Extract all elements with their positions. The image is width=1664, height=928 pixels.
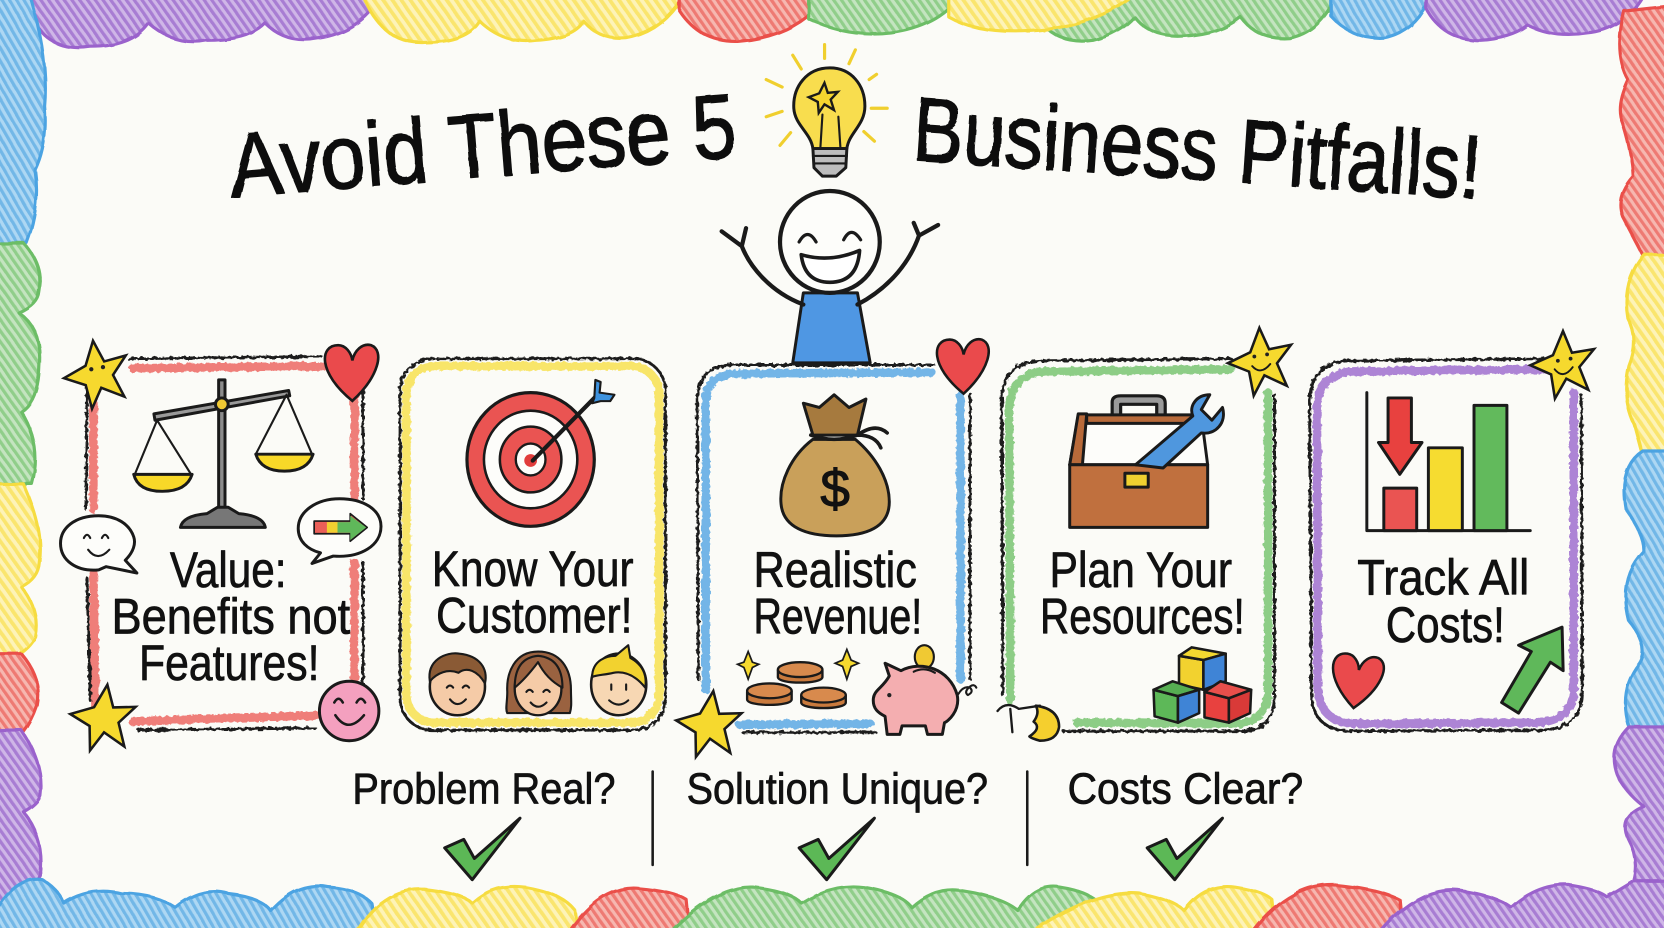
icon: heart on frame bbox=[937, 339, 989, 394]
bulb star bbox=[809, 83, 838, 113]
panel 3 text: Revenue! bbox=[753, 589, 922, 645]
panel: know your customer bbox=[400, 359, 665, 730]
icon: star top right of panel 4 bbox=[1225, 325, 1296, 398]
bulb filament bbox=[820, 115, 840, 149]
panel 3 text bbox=[753, 542, 922, 645]
dollar sign: $ bbox=[820, 460, 850, 519]
panel 2 frame bbox=[400, 359, 665, 730]
panel 2 text: Know Your bbox=[432, 541, 634, 597]
panel 1 text: Features! bbox=[139, 635, 319, 691]
panel 2 text: Customer! bbox=[436, 587, 632, 643]
bar red bbox=[1384, 488, 1417, 531]
figure arms bbox=[722, 223, 938, 305]
panel 4 text: Plan Your bbox=[1050, 542, 1232, 598]
icon: toolbox bbox=[1070, 395, 1223, 527]
panel 2 text bbox=[432, 541, 634, 643]
icon: building blocks bbox=[1154, 647, 1251, 723]
panel 5 text: Track All bbox=[1357, 549, 1529, 605]
icon: speech bubble arrow bbox=[298, 499, 381, 563]
checklist: solution unique: Solution Unique? bbox=[687, 765, 988, 813]
checklist: solution unique bbox=[687, 765, 988, 880]
panel 4 text: Resources! bbox=[1040, 589, 1245, 645]
icon: coins bbox=[747, 662, 846, 708]
panel 5 text bbox=[1357, 549, 1529, 653]
panel 1 frame bbox=[86, 357, 363, 730]
icon: star bottom left bbox=[68, 682, 137, 753]
icon: star top left bbox=[58, 336, 134, 413]
icon: pink smiley bbox=[319, 681, 379, 741]
icon: balance scale bbox=[134, 380, 313, 527]
bulb rays bbox=[766, 45, 887, 145]
icon: star on frame bbox=[674, 689, 743, 760]
arrow down red bbox=[1379, 398, 1422, 474]
checklist: problem real: Problem Real? bbox=[352, 765, 616, 813]
icon: crescent coin and scribble bbox=[998, 705, 1059, 741]
figure eyes bbox=[799, 232, 861, 242]
checklist: problem real bbox=[352, 765, 616, 880]
icon: heart top right bbox=[325, 345, 378, 401]
title: left part: Avoid These 5 bbox=[225, 75, 741, 217]
checklist: costs clear bbox=[1068, 765, 1303, 880]
bar yellow bbox=[1428, 448, 1462, 531]
face girl bbox=[506, 652, 571, 715]
border: top edge bbox=[32, 0, 1644, 48]
icon: light bulb bbox=[766, 45, 887, 176]
border: left edge bbox=[0, 0, 45, 928]
wrench bbox=[1135, 395, 1223, 468]
panel: plan your resources bbox=[998, 325, 1296, 741]
icon: heart bbox=[1328, 652, 1385, 711]
figure body bbox=[793, 293, 870, 363]
icon: speech bubble smile bbox=[61, 516, 137, 573]
panel 5 frame bbox=[1310, 359, 1582, 731]
figure head bbox=[780, 191, 880, 293]
title bbox=[225, 75, 1485, 219]
border: bottom edge bbox=[0, 879, 1664, 928]
figure smile bbox=[801, 250, 860, 282]
bar green bbox=[1474, 405, 1507, 531]
panel: track all costs bbox=[1310, 329, 1597, 731]
panel 3 text: Realistic bbox=[753, 542, 917, 598]
panel: value bbox=[58, 336, 381, 753]
stick figure mascot bbox=[722, 191, 938, 363]
panel 3 frame bbox=[697, 365, 970, 732]
icon: piggy bank bbox=[873, 645, 976, 734]
panel: realistic revenue bbox=[674, 339, 989, 760]
chart axes bbox=[1367, 393, 1530, 531]
border: right edge bbox=[1614, 5, 1664, 928]
panel 5 text: Costs! bbox=[1386, 597, 1505, 653]
title: right part: Business Pitfalls! bbox=[910, 78, 1485, 219]
checklist: costs clear: Costs Clear? bbox=[1068, 765, 1303, 813]
face boy bbox=[429, 653, 486, 715]
arrow: up green bbox=[1502, 627, 1563, 713]
icon: customer faces bbox=[429, 645, 646, 715]
icon: money bag bbox=[781, 395, 889, 536]
icon: sparkles bbox=[738, 649, 859, 679]
panel 4 frame bbox=[1002, 359, 1275, 731]
panel 1 text: Benefits not bbox=[111, 589, 350, 645]
checklist row bbox=[352, 765, 1303, 880]
divider one bbox=[651, 771, 654, 865]
panel 1 text bbox=[111, 542, 350, 691]
face blond bbox=[591, 645, 646, 715]
icon: star top right of panel 5 bbox=[1528, 329, 1597, 400]
bulb screw base bbox=[813, 149, 847, 176]
bulb glass bbox=[794, 68, 865, 149]
icon: target with arrow bbox=[467, 380, 614, 526]
panel 1 text: Value: bbox=[170, 542, 287, 598]
divider two bbox=[1026, 771, 1028, 865]
panel 4 text bbox=[1040, 542, 1245, 645]
chart: cost bars bbox=[1367, 393, 1530, 531]
